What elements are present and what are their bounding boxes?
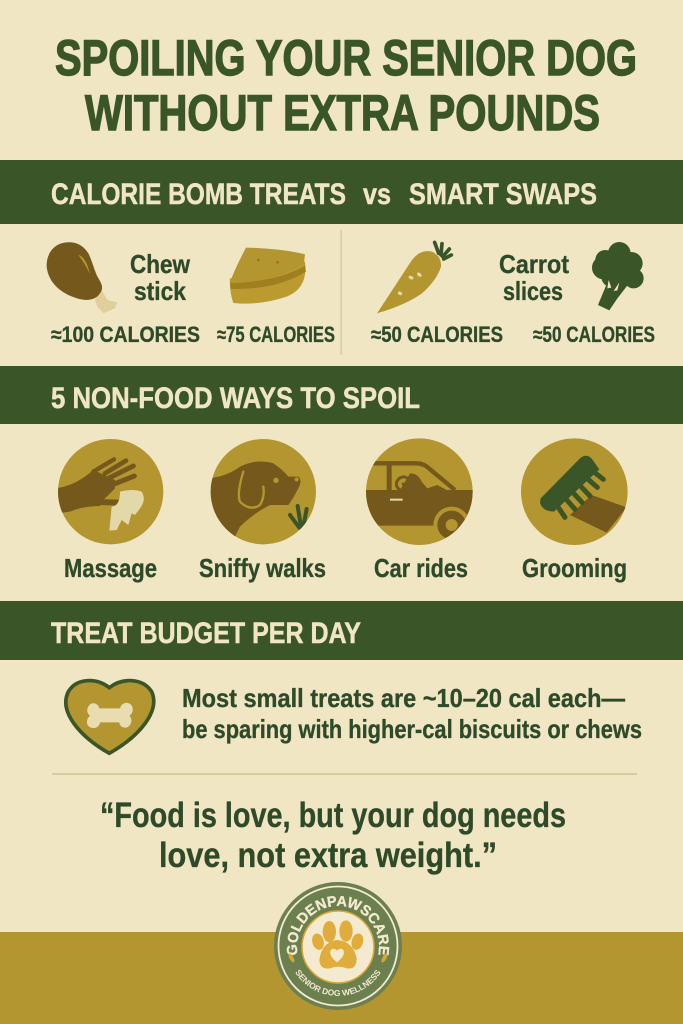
panel: treats comparison — [47, 230, 655, 355]
label: sniffy walks: Sniffy walks — [199, 553, 326, 583]
section header: treat budget per day: TREAT BUDGET PER DAY — [51, 617, 361, 650]
section header: calorie bomb treats vs smart swaps: CALORIE BOMB TREATS — [51, 178, 346, 211]
label: carrot slices: slices — [503, 276, 563, 306]
icon: sniffy walks — [208, 439, 316, 544]
label: chew stick: stick — [134, 276, 186, 306]
calorie labels: ≈100 CALORIES — [51, 322, 200, 347]
label: grooming: Grooming — [522, 553, 627, 583]
quote: love, not extra weight.” — [159, 836, 497, 875]
section header: 5 non-food ways to spoil: 5 NON-FOOD WAYS TO SPOIL — [51, 382, 420, 415]
calorie labels — [51, 322, 655, 347]
calorie labels: ≈75 CALORIES — [217, 322, 335, 347]
section header: calorie bomb treats vs smart swaps — [0, 160, 683, 224]
title — [55, 30, 637, 141]
quote: “Food is love, but your dog needs — [100, 796, 566, 835]
icon: grooming comb — [521, 438, 628, 545]
label: car rides: Car rides — [374, 553, 468, 583]
icon: car rides — [363, 438, 473, 545]
icon: paw — [310, 920, 365, 969]
brand name: GOLDENPAWSCARE — [286, 896, 390, 956]
footer band — [0, 932, 683, 1024]
label: chew stick: Chew — [130, 249, 191, 279]
section header: 5 non-food ways to spoil — [0, 366, 683, 424]
leaf accents — [287, 953, 389, 963]
icon: broccoli — [592, 242, 644, 310]
label: chew stick — [130, 249, 191, 306]
tagline: SENIOR DOG WELLNESS — [296, 970, 380, 996]
icon: carrot — [377, 242, 451, 313]
section header: calorie bomb treats vs smart swaps: SMART SWAPS — [409, 178, 597, 211]
calorie labels: ≈50 CALORIES — [371, 322, 503, 347]
text: treat budget note: Most small treats are ~10–20 cal each— — [182, 683, 625, 713]
icon: drumstick — [47, 242, 117, 313]
logo badge — [274, 882, 402, 1010]
section header: calorie bomb treats vs smart swaps: vs — [363, 178, 391, 211]
label: carrot slices — [499, 249, 569, 306]
quote — [100, 796, 566, 875]
icon: massage — [57, 439, 163, 544]
section header: treat budget per day — [0, 601, 683, 660]
text: treat budget note — [182, 683, 642, 744]
label: carrot slices: Carrot — [499, 249, 569, 279]
icon: biscuit wedge — [230, 248, 306, 304]
icon: heart with bone — [66, 681, 154, 753]
label: massage: Massage — [64, 553, 157, 583]
